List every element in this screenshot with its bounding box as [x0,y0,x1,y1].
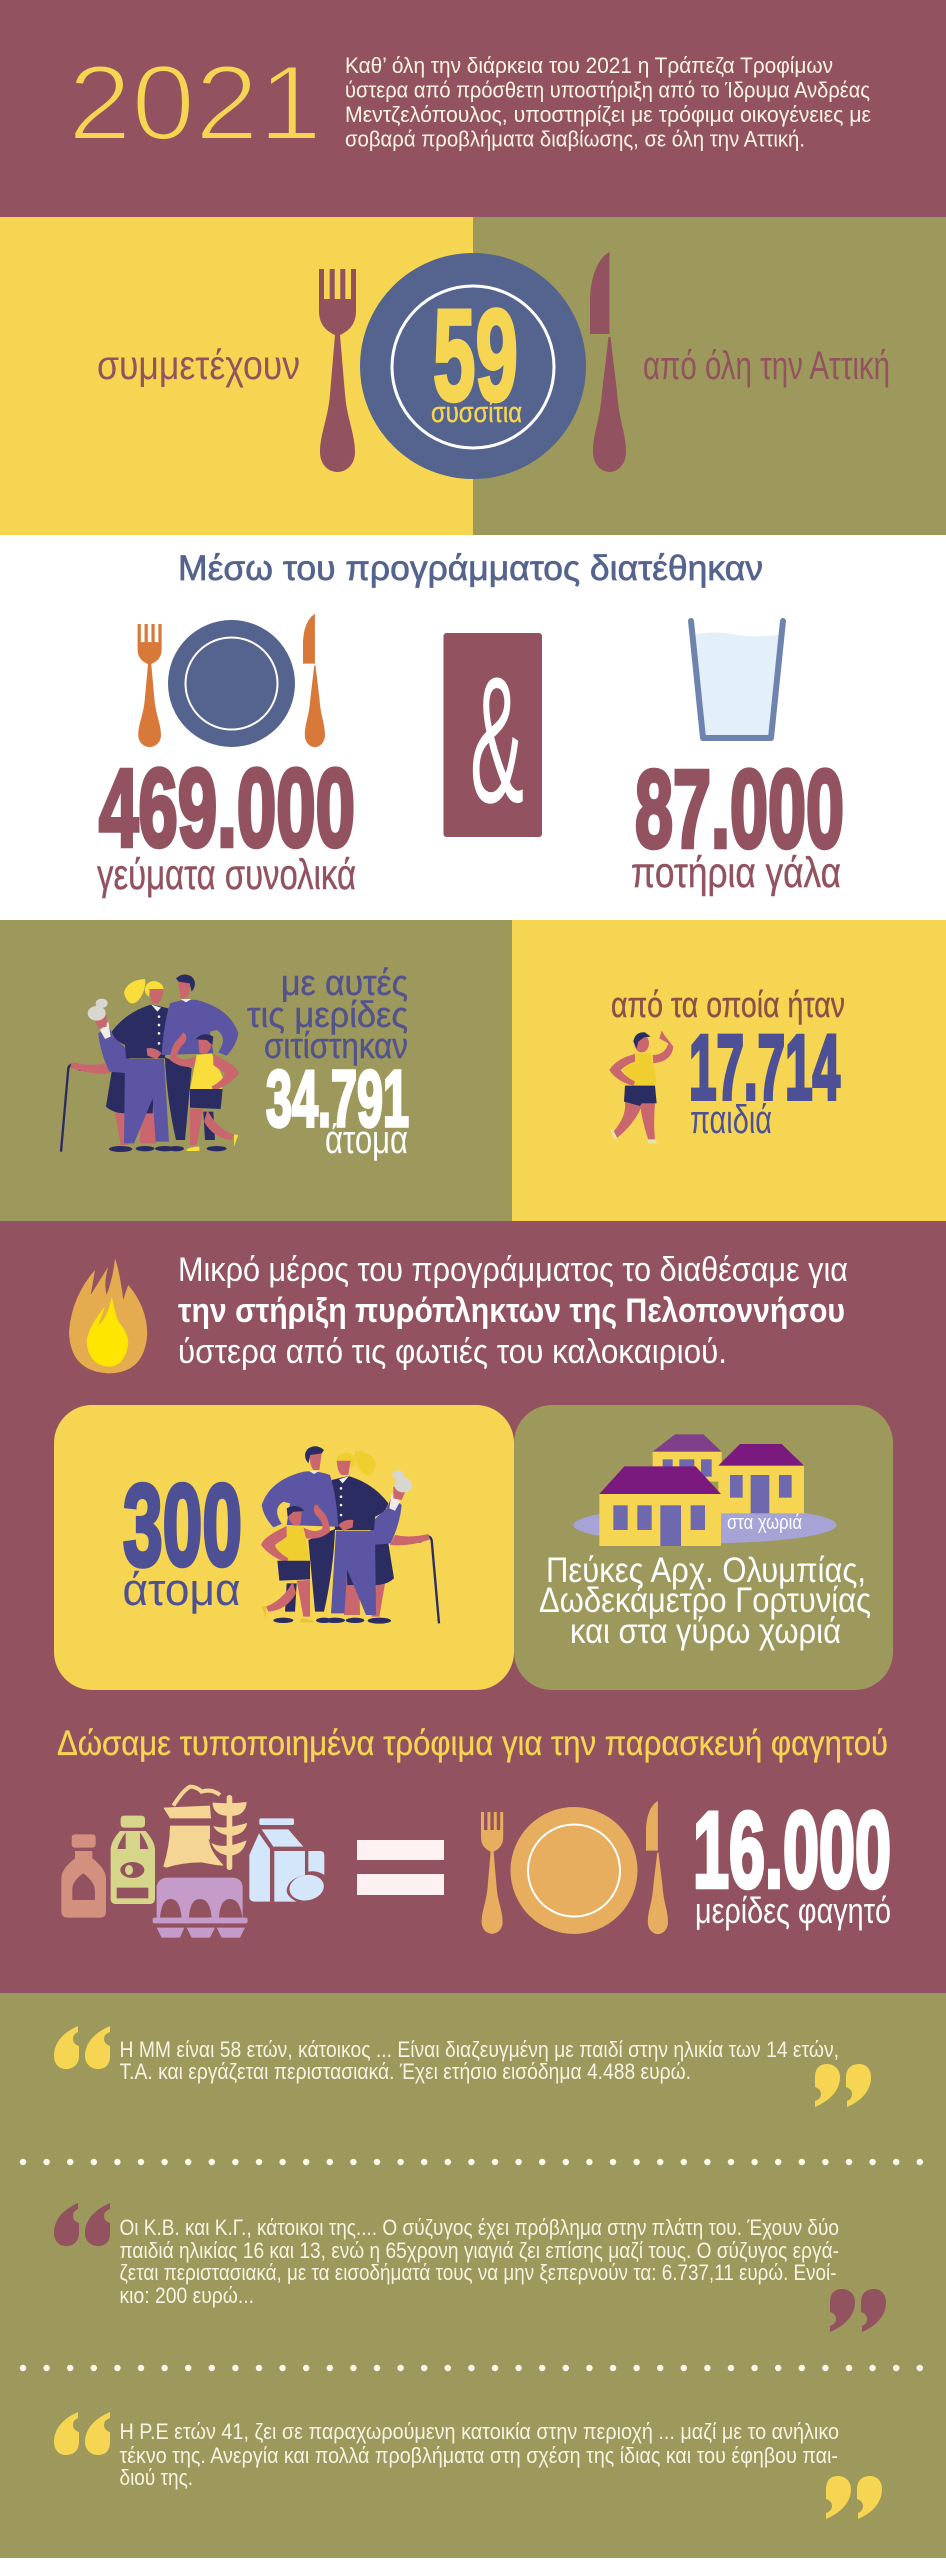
text: testimonial 1 [120,2037,839,2084]
text: testimonial 3: Η Ρ.Ε ετών 41, ζει σε παραχωρούμενη κατοικία στην περιοχή ... μαζί με το ανήλικο [120,2419,839,2444]
label: children: παιδιά [690,1098,772,1142]
text: with these portions were fed: τις μερίδες [247,994,408,1035]
icon: village houses [573,1434,837,1546]
text: village names: Δωδεκάμετρο Γορτυνίας [539,1581,871,1620]
illustration: family in card [261,1446,439,1624]
illustration: child [609,1031,673,1143]
intro text: Καθ’ όλη την διάρκεια του 2021 η Τράπεζα Τροφίμων [345,53,833,78]
icon: place setting [138,614,325,747]
label: in villages: στα χωριά [727,1512,802,1534]
label: milk: ποτήρια γάλα [631,849,841,897]
number: meals: 469.000 [99,747,355,870]
panel: testimonials [0,1993,946,2558]
icon: closing quote 3 [826,2476,882,2519]
icon: opening quote 2 [54,2203,110,2246]
text: fire support statement [178,1251,848,1371]
text: testimonial 2 [120,2215,839,2308]
text: testimonial 3: διού της. [120,2465,193,2490]
label: people: άτομα [325,1118,408,1162]
text: testimonial 2: Οι Κ.Β. και Κ.Γ., κάτοικοι της.... Ο σύζυγος έχει πρόβλημα στην πλάτη του. Έχουν δύο [120,2215,839,2240]
text: village names: Πεύκες Αρχ. Ολυμπίας, [546,1551,866,1590]
icon: knife [590,252,626,472]
icon: equals sign [357,1840,444,1895]
year 2021: 2021 [68,42,322,162]
intro text: ύστερα από πρόσθετη υποστήριξη από το Ίδρυμα Ανδρέας [345,78,870,102]
number: people: 34.791 [266,1054,409,1143]
panel: 59 soup kitchens [0,217,946,535]
icon: glass of milk [691,621,783,738]
label: soup kitchens: συσσίτια [431,397,522,429]
icon: closing quote 1 [815,2064,871,2107]
panel: support for fire victims [0,1221,946,1993]
panel: meals and milk [0,535,946,920]
icon: plate with 59 [360,253,586,479]
text: testimonial 3: τέκνο της. Ανεργία και πολλά προβλήματα στη σχέση της ίδιας και του έφηβου παι- [120,2443,838,2468]
text: with these portions were fed: με αυτές [281,962,408,1003]
icon: opening quote 3 [54,2412,110,2455]
text: village names: και στα γύρω χωριά [570,1612,841,1651]
icon: flame [69,1258,147,1373]
icon: fork [319,269,356,472]
label: participate: συμμετέχουν [97,342,300,388]
label: portions of food: μερίδες φαγητό [695,1890,891,1931]
icon: opening quote 1 [54,2026,110,2069]
text: testimonial 1: Τ.Α. και εργάζεται περιστασιακά. Έχει ετήσιο εισόδημα 4.488 ευρώ. [120,2059,691,2084]
ampersand box: & [470,640,524,841]
number: 300: 300 [123,1460,242,1590]
intro text [345,53,871,152]
intro text: Μεντζελόπουλος, υποστηρίζει με τρόφιμα οικογένειες με [345,102,871,127]
ampersand box [444,633,542,841]
text: testimonial 2: ζεται περιστασιακά, με τα εισοδήματά τους να μην ξεπερνούν τα: 6.737,11 ευρώ. Ενοί- [120,2260,836,2285]
text: of which were: από τα οποία ήταν [611,984,845,1025]
text: fire support statement: Μικρό μέρος του προγράμματος το διαθέσαμε για [178,1251,848,1289]
illustration: family [61,975,239,1152]
card: 300 people [54,1405,514,1690]
text: testimonial 2: κιο: 200 ευρώ... [120,2283,254,2308]
panel: intro header [0,0,946,217]
text: testimonial 3 [120,2419,839,2490]
heading: Μέσω του προγράμματος διατέθηκαν [178,549,763,588]
label: people: άτομα [122,1564,240,1615]
number 59: 59 [433,282,518,428]
text: fire support statement: την στήριξη πυρόπληκτων της Πελοποννήσου [178,1292,845,1330]
label: meals: γεύματα συνολικά [97,851,356,899]
text: with these portions were fed [247,962,408,1066]
intro text: σοβαρά προβλήματα διαβίωσης, σε όλη την Αττική. [345,126,805,152]
icon: food group [61,1787,326,1938]
text: testimonial 1: Η ΜΜ είναι 58 ετών, κάτοικος ... Είναι διαζευγμένη με παιδί στην ηλικία των 14 ετών, [120,2037,839,2062]
text: with these portions were fed: σιτίστηκαν [264,1025,408,1066]
panel: people fed [0,920,946,1221]
text: village names [539,1551,871,1651]
icon: closing quote 2 [830,2289,886,2332]
text: fire support statement: ύστερα από τις φωτιές του καλοκαιριού. [178,1333,727,1371]
card: villages [514,1405,893,1690]
icon: gold place setting [481,1801,668,1934]
text: testimonial 2: παιδιά ηλικίας 16 και 13, ενώ η 65χρονη γιαγιά ζει επίσης μαζί τους. Ο σύζυγος εργά- [120,2238,839,2263]
